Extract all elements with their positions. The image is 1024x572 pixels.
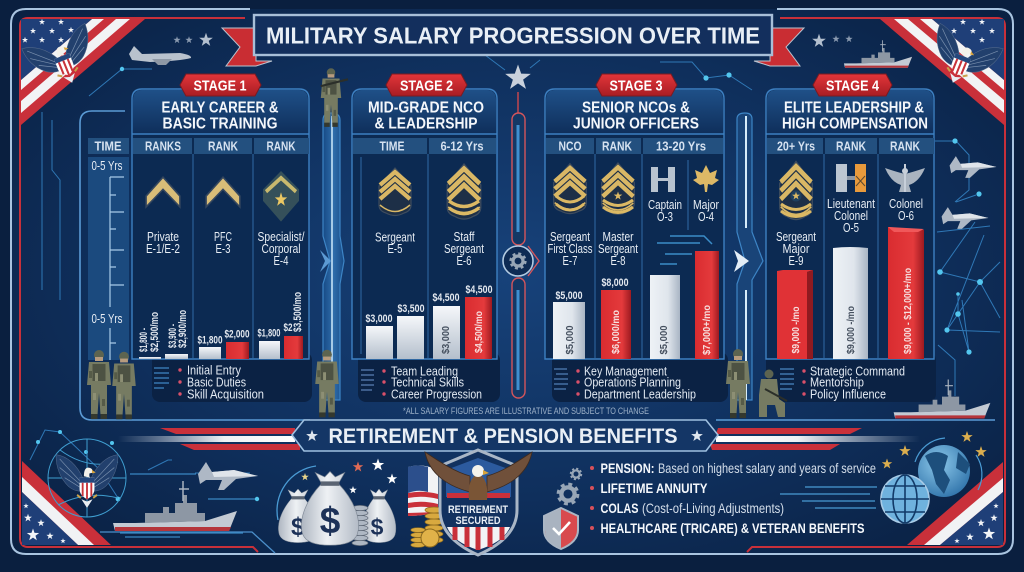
salary bars stage 2: $3,000 xyxy=(441,326,452,354)
rank labels: E-3 xyxy=(216,242,231,256)
rank labels: E-6 xyxy=(456,254,472,268)
icon: check shield xyxy=(544,508,578,549)
circuit network lines xyxy=(30,55,1000,498)
rank labels: Major xyxy=(693,198,719,212)
rank labels xyxy=(146,230,305,268)
bullets stage 4 xyxy=(802,364,905,402)
panel: stage 4: RANK xyxy=(890,140,920,154)
stage pill 3 xyxy=(596,74,677,96)
rank labels: Colonel xyxy=(889,197,923,211)
benefits list: PENSION: xyxy=(600,460,654,476)
bullets stage 2: Career Progression xyxy=(391,386,482,402)
connector: rail 3 xyxy=(734,113,763,400)
icon: eagle top right xyxy=(921,23,1003,95)
heading stage 3: JUNIOR OFFICERS xyxy=(573,116,699,132)
icon: ship lower left xyxy=(113,481,237,531)
rank labels: Specialist/ xyxy=(258,230,305,244)
salary bars stage 4: $9,000 -/mo xyxy=(791,306,802,354)
salary bars stage 2: $3,000 xyxy=(366,313,392,325)
rank labels: Sergeant xyxy=(444,242,484,256)
salary bars stage 4: $9,000 -/mo xyxy=(846,306,857,354)
rank labels: O-6 xyxy=(898,209,914,223)
icon: jet right lower xyxy=(942,207,988,229)
bullets stage 2 xyxy=(382,364,482,402)
bullets stage 3: Key Management xyxy=(584,364,667,378)
salary bars stage 1: $2,500/mo xyxy=(149,312,161,352)
benefits list: (Cost-of-Living Adjustments) xyxy=(642,500,784,516)
bullets stage 4: Mentorship xyxy=(810,374,864,390)
rank labels: Corporal xyxy=(262,242,300,256)
bullets stage 1: Skill Acquisition xyxy=(187,386,264,402)
salary bars stage 1: $2 xyxy=(284,322,292,334)
retirement banner: RETIREMENT & PENSION BENEFITS xyxy=(328,425,678,448)
rank labels: E-1/E-2 xyxy=(146,242,180,256)
title ribbon right xyxy=(754,28,804,66)
panel: stage 2: 6-12 Yrs xyxy=(440,140,484,154)
salary bars stage 3: $5,000 xyxy=(659,325,670,354)
panel: stage 1: RANK xyxy=(266,140,296,154)
stage pill 1: STAGE 1 xyxy=(194,78,246,94)
stage pill 1 xyxy=(180,74,261,96)
panel: stage 2 xyxy=(352,74,500,402)
stars: top right xyxy=(812,34,853,47)
footnote: *ALL SALARY FIGURES ARE ILLUSTRATIVE AND SUBJECT TO CHANGE xyxy=(403,406,649,416)
rank insignia: colonel xyxy=(885,164,925,192)
rank insignia: major xyxy=(693,165,719,192)
corner flag: top right xyxy=(880,19,1004,125)
salary bars stage 3: $7,000+/mo xyxy=(702,305,713,355)
icon: eagle lower left xyxy=(56,455,118,508)
soldier: kneeling xyxy=(759,370,787,417)
salary bars stage 2: $4,500 xyxy=(466,284,492,296)
rank labels: Lieutenant xyxy=(827,197,875,211)
rank labels xyxy=(776,197,923,268)
salary bars stage 1: $1,800 xyxy=(258,328,280,340)
rank labels: E-8 xyxy=(610,254,626,268)
salary bars stage 2: $4,500/mo xyxy=(474,311,485,353)
rank labels: E-4 xyxy=(274,254,289,268)
rank labels: O-3 xyxy=(657,210,673,224)
bullets stage 3 xyxy=(576,364,696,402)
icon: gold coins xyxy=(411,507,443,547)
rank insignia: E-6 xyxy=(447,164,481,219)
heading stage 2: MID-GRADE NCO xyxy=(368,100,484,116)
rank labels: Sergeant xyxy=(598,242,638,256)
rank insignia: E-9 xyxy=(780,162,812,219)
salary bars stage 1: $3,500/mo xyxy=(292,292,304,332)
soldier: stage 2 xyxy=(315,350,339,417)
salary bars stage 1: $1,800 - xyxy=(138,328,150,352)
stars: top left xyxy=(173,33,213,46)
salary bars stage 2 xyxy=(366,284,492,359)
rank insignia: captain xyxy=(651,167,675,192)
heading stage 3 xyxy=(573,100,699,132)
heading stage 3: SENIOR NCOs & xyxy=(582,100,690,116)
heading stage 2 xyxy=(368,100,484,132)
rank labels: Sergeant xyxy=(776,230,816,244)
stripes right xyxy=(710,428,920,450)
network globe lower left xyxy=(48,439,126,517)
stage pill 4 xyxy=(813,74,892,96)
soldier: top with rifle xyxy=(321,68,348,127)
time column: 0-5 Yrs xyxy=(92,159,122,173)
heading stage 4: ELITE LEADERSHIP & xyxy=(784,100,924,116)
panel: stage 3: 13-20 Yrs xyxy=(656,140,706,154)
rank insignia: E-8 xyxy=(602,163,634,214)
icon: center star xyxy=(505,64,531,89)
rank labels: Sergeant xyxy=(550,230,590,244)
bullets stage 1: Basic Duties xyxy=(187,374,246,390)
stage pill 2: STAGE 2 xyxy=(400,78,453,94)
bullets stage 2: Technical Skills xyxy=(391,374,464,390)
rank labels: Private xyxy=(147,230,179,244)
stripes left xyxy=(118,428,300,450)
connector: rail 2 with gear xyxy=(503,92,539,398)
salary bars stage 2: $3,500 xyxy=(398,303,424,315)
rank labels: Sergeant xyxy=(375,230,415,244)
bullets stage 1 xyxy=(178,362,264,402)
salary bars stage 1: $2,000 xyxy=(224,328,250,340)
rank labels: Master xyxy=(602,230,634,244)
corner flag: bottom left xyxy=(22,461,111,545)
icon: eagle top left xyxy=(22,23,104,95)
rank labels: Colonel xyxy=(834,209,868,223)
rank insignia: E-5 xyxy=(379,168,411,216)
rank labels: PFC xyxy=(214,230,232,244)
circuit nodes xyxy=(36,67,983,501)
retirement secured shield xyxy=(425,450,532,555)
icon: list 4 xyxy=(780,369,794,389)
heading stage 1 xyxy=(162,100,279,132)
salary bars stage 1 xyxy=(138,292,304,359)
retirement secured shield: RETIREMENT xyxy=(448,504,508,516)
title ribbon left xyxy=(222,28,272,66)
salary bars stage 1: $3,900 - xyxy=(167,324,179,348)
icon: wire globe xyxy=(881,475,929,523)
stage pill 3: STAGE 3 xyxy=(610,78,662,94)
title xyxy=(254,15,772,55)
rank insignia: specialist xyxy=(263,171,299,222)
icon: ship stage 4 xyxy=(894,379,990,418)
icon: jet right upper xyxy=(950,156,996,178)
icon: gears xyxy=(558,469,581,504)
panel: stage 1: RANK xyxy=(208,140,238,154)
heading stage 4: HIGH COMPENSATION xyxy=(782,116,928,132)
rank labels: E-5 xyxy=(388,242,403,256)
icon: earth globe xyxy=(915,438,982,497)
icon: money bags xyxy=(277,458,397,546)
icon: american flag xyxy=(408,466,438,516)
gold stars right xyxy=(882,431,987,468)
panel: stage 4: RANK xyxy=(836,140,866,154)
bullets stage 4: Policy Influence xyxy=(810,386,886,402)
time column xyxy=(88,138,129,360)
rank insignia: lieutenant colonel xyxy=(836,164,866,192)
panel: stage 1 xyxy=(88,74,312,402)
benefits list: HEALTHCARE (TRICARE) & VETERAN BENEFITS xyxy=(600,520,864,536)
benefits list: COLAS xyxy=(600,500,638,516)
bullets stage 1: Initial Entry xyxy=(187,362,241,378)
corner flag: top left xyxy=(21,19,145,125)
panel: stage 4 xyxy=(766,74,936,402)
benefits list: Based on highest salary and years of service xyxy=(658,460,876,476)
rank labels xyxy=(375,230,484,268)
heading stage 2: & LEADERSHIP xyxy=(374,116,478,132)
salary bars stage 3 xyxy=(553,251,719,359)
panel: stage 1: RANKS xyxy=(145,140,181,154)
corner flag: bottom right xyxy=(907,462,1003,545)
retirement banner xyxy=(292,420,718,451)
icon: airplane xyxy=(129,46,191,65)
heading stage 1: BASIC TRAINING xyxy=(162,116,278,132)
connector: rail 1 xyxy=(320,113,344,400)
rank labels: E-9 xyxy=(788,254,804,268)
bullets stage 3: Operations Planning xyxy=(584,374,681,390)
heading stage 4 xyxy=(782,100,928,132)
stage pill 4: STAGE 4 xyxy=(826,78,880,94)
panel: stage 2: TIME xyxy=(380,140,404,154)
rank labels xyxy=(548,198,719,268)
rank insignia: PFC xyxy=(206,177,240,207)
salary bars stage 2: $4,500 xyxy=(432,292,460,304)
bullets stage 3: Department Leadership xyxy=(584,386,696,402)
benefits list xyxy=(590,460,876,536)
salary bars stage 3: $8,000 xyxy=(602,277,628,289)
rank labels: Major xyxy=(782,242,810,256)
salary bars stage 3: $5,000 xyxy=(556,290,582,302)
salary bars stage 4: $9,000 - $12,000+/mo xyxy=(903,268,914,354)
panel: stage 3: RANK xyxy=(602,140,632,154)
rank labels: O-5 xyxy=(843,221,859,235)
icon: list 3 xyxy=(554,369,568,389)
salary bars stage 1: $1,800 xyxy=(198,334,222,346)
rank insignia: private xyxy=(146,177,180,207)
panel: stage 3 xyxy=(545,74,728,402)
panel: stage 3: NCO xyxy=(558,140,582,154)
speed streaks xyxy=(657,236,712,264)
time column: 0-5 Yrs xyxy=(92,312,122,326)
rank labels: First Class xyxy=(548,242,592,256)
salary bars stage 4 xyxy=(777,227,924,359)
icon: money bags: $ xyxy=(371,514,384,540)
stage pill 2 xyxy=(386,74,467,96)
salary bars stage 3: $6,000/mo xyxy=(611,310,622,354)
salary bars stage 1: $2,900/mo xyxy=(177,310,189,348)
icon: ship top right xyxy=(844,40,912,68)
icon: money bags: $ xyxy=(320,500,341,541)
bullets stage 4: Strategic Command xyxy=(810,364,905,378)
rank labels: O-4 xyxy=(698,210,714,224)
motion lines xyxy=(120,474,255,537)
bullets stage 2: Team Leading xyxy=(391,364,458,378)
rank labels: Captain xyxy=(648,198,682,212)
panel: stage 4: 20+ Yrs xyxy=(777,140,815,154)
heading stage 1: EARLY CAREER & xyxy=(162,100,279,116)
retirement secured shield: SECURED xyxy=(456,515,501,527)
icon: list 1 xyxy=(154,368,169,388)
icon: money bags: $ xyxy=(291,513,305,541)
icon: list 2 xyxy=(361,370,374,390)
rank labels: Staff xyxy=(454,230,475,244)
title: MILITARY SALARY PROGRESSION OVER TIME xyxy=(266,22,760,48)
rank insignia: E-7 xyxy=(554,164,586,214)
data lines right xyxy=(780,487,877,508)
soldiers: stage 1 xyxy=(87,350,136,419)
time column: TIME xyxy=(94,140,122,154)
icon: jet lower left xyxy=(198,462,258,490)
rank labels: E-7 xyxy=(562,254,578,268)
soldier: stage 3 xyxy=(726,349,750,418)
benefits list: LIFETIME ANNUITY xyxy=(600,480,708,496)
salary bars stage 3: $5,000 xyxy=(565,325,576,354)
